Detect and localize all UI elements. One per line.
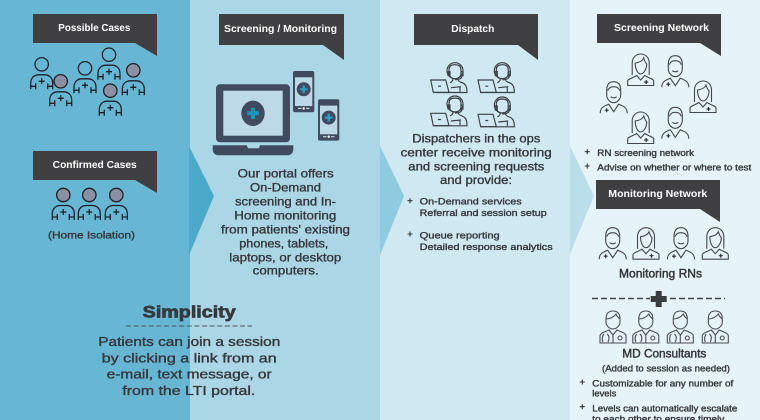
heading: Simplicity: Simplicity [143,302,236,321]
text: dispatcher description: and screening requests [408,160,544,174]
panel: dispatch background [380,0,570,420]
text: simplicity description: Patients can join a session [98,334,280,349]
arrow: screening to dispatch [380,146,404,255]
text: portal description: laptops, or desktop [229,250,342,264]
list: dispatch services: Detailed response analytics [420,242,553,253]
heading: Screening / Monitoring [219,14,344,60]
text: MD Consultants: MD Consultants [622,349,707,361]
divider: plus with dashes [592,291,725,307]
text: portal description: phones, tablets, [239,236,328,250]
list: monitoring network notes [580,378,737,420]
list: dispatch services: On-Demand services [420,197,522,208]
text: dispatcher description: Dispatchers in the ops [412,132,540,146]
arrow: cases to screening [189,146,214,255]
list: screening network notes: Advise on whether or where to test [597,163,752,173]
text: portal description: Our portal offers [238,166,334,180]
text: portal description: Home monitoring [234,208,336,222]
text: simplicity description: e-mail, text message, or [107,366,272,381]
list: monitoring network notes: levels [592,389,617,399]
icon group: monitoring RNs [599,228,728,259]
panel: screening and monitoring background [190,0,380,420]
heading: Dispatch: Dispatch [451,24,494,35]
heading: Monitoring Network: Monitoring Network [608,189,708,200]
arrow: dispatch to networks [570,146,594,254]
list: dispatch services [408,197,553,253]
text: portal description: computers. [253,264,319,278]
text: portal description: On-Demand [250,180,321,194]
panel: networks background [570,0,760,420]
text: dispatcher description: center receive monitoring [401,146,552,160]
text: dispatcher description: and provide: [440,173,512,187]
heading: Possible Cases: Possible Cases [58,23,131,34]
list: dispatch services: Referral and session setup [420,208,547,219]
list: monitoring network notes: Customizable for any number of [592,378,734,388]
icon group: screening nurses [600,54,716,144]
heading: Screening Network [597,14,721,56]
text: dispatcher description [401,132,552,187]
heading: Monitoring Network [596,180,720,222]
heading: Confirmed Cases [33,151,157,193]
icon group: confirmed case people [52,188,127,220]
heading: Screening / Monitoring: Screening / Monitoring [224,24,337,35]
text: Monitoring RNs: Monitoring RNs [619,269,702,281]
text: simplicity description: from the LTI portal. [122,383,255,398]
text: simplicity description [98,334,280,398]
text: portal description: screening and In- [235,194,336,208]
list: monitoring network notes: Levels can automatically escalate [592,403,737,413]
icon: laptop with phones [213,71,339,155]
text: added to session note: (Added to session as needed) [602,363,730,374]
heading: Possible Cases [33,14,157,56]
list: dispatch services: Queue reporting [420,230,500,241]
heading: Screening Network: Screening Network [614,23,709,34]
text: portal description: from patients' existing [221,222,350,236]
icon group: MD consultants [600,311,728,343]
text: home isolation: (Home Isolation) [48,230,135,242]
heading: Confirmed Cases: Confirmed Cases [53,160,137,171]
text: simplicity description: by clicking a link from an [102,351,277,366]
text: portal description [221,166,350,278]
panel: cases background [0,0,190,420]
list: screening network notes: RN screening network [597,148,695,158]
icon group: dispatch operators [431,63,515,127]
icon group: possible case people [31,48,144,116]
heading: Dispatch [414,14,538,60]
list: screening network notes [585,148,752,173]
